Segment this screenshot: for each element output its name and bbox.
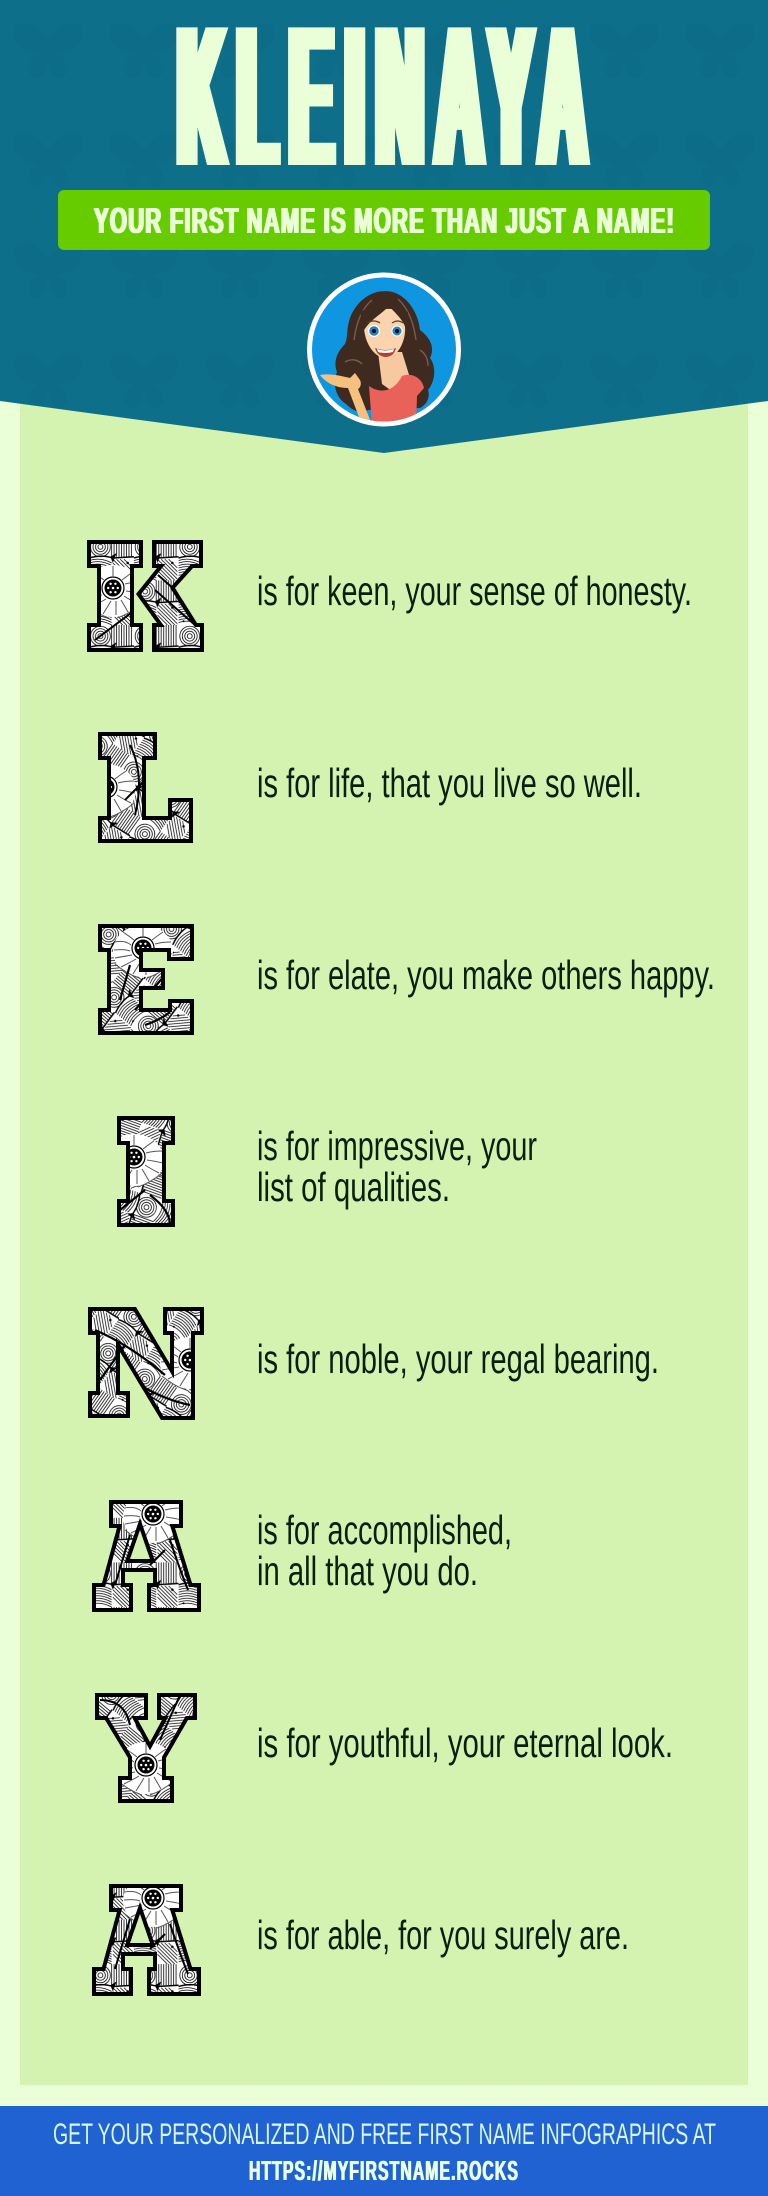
letter N zentangle (88, 1307, 204, 1420)
letter Y zentangle (95, 1693, 197, 1803)
text (257, 1507, 512, 1594)
panel: letter rows (76, 535, 715, 2000)
letter E zentangle (98, 924, 194, 1035)
text: is for impressive, your (257, 1123, 537, 1169)
panel: content background (20, 380, 748, 2085)
text (257, 1123, 537, 1210)
mouth (375, 348, 396, 357)
row: L (98, 732, 640, 843)
row: K (80, 535, 692, 657)
text: in all that you do. (257, 1548, 478, 1594)
eyes (368, 325, 380, 337)
neck and chest (378, 352, 409, 389)
letter A zentangle (92, 1884, 201, 1996)
row: A second (92, 1884, 626, 1996)
text: is for accomplished, (257, 1507, 512, 1553)
face (364, 309, 405, 358)
footer (0, 2106, 768, 2196)
row: N (84, 1302, 659, 1424)
subtitle banner (58, 190, 710, 250)
letter K zentangle (87, 540, 204, 652)
letter L zentangle (98, 732, 193, 843)
text: list of qualities. (257, 1164, 450, 1210)
coral shirt (369, 375, 424, 425)
letter A zentangle (92, 1500, 201, 1612)
hair (335, 291, 434, 412)
footer link: HTTPS://MYFIRSTNAME.ROCKS (249, 2155, 519, 2186)
row: E (90, 920, 715, 1040)
arm and hand (320, 373, 370, 420)
row: I (117, 1116, 536, 1227)
row: A (92, 1500, 510, 1612)
row: Y (90, 1688, 673, 1808)
letter I zentangle (117, 1116, 175, 1227)
icon: woman avatar (310, 275, 458, 425)
header panel (0, 0, 768, 453)
